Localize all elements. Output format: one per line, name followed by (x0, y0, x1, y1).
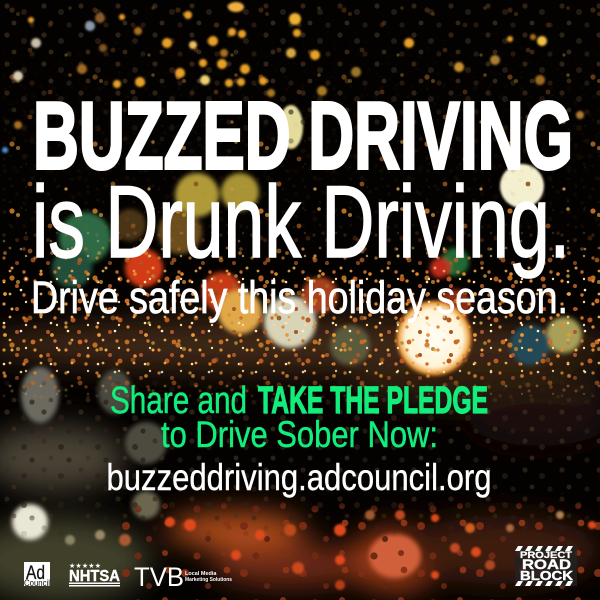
pledge line 1: Share and (110, 380, 247, 422)
logo: TVB (134, 562, 232, 592)
bright lights (500, 164, 544, 208)
logo: Ad Council: Ad (26, 563, 45, 584)
bokeh discs (12, 173, 582, 578)
pledge line 1 (110, 380, 488, 422)
logo: TVB: TVB (134, 562, 184, 592)
logo: NHTSA: ★★★★★ (69, 562, 101, 570)
logo: NHTSA (69, 562, 120, 586)
logo: TVB: Marketing Solutions (185, 577, 232, 583)
call to action (106, 380, 492, 498)
logo: Project Roadblock: BLOCK (520, 568, 574, 583)
logo: Ad Council: Council (24, 578, 50, 588)
logo: NHTSA: NHTSA (69, 568, 120, 585)
logo: Project Roadblock: ROAD (522, 556, 571, 572)
lower red droplets (65, 510, 596, 590)
top highlight droplets (2, 2, 584, 153)
logo: Project Roadblock (515, 546, 577, 586)
bottom blurred traffic lights (0, 317, 600, 600)
url: buzzeddriving.adcouncil.org (106, 457, 492, 498)
pledge line 2: to Drive Sober Now: (161, 414, 438, 455)
logo: Project Roadblock: PROJECT (520, 550, 573, 560)
logo: TVB: Local Media (185, 571, 217, 577)
